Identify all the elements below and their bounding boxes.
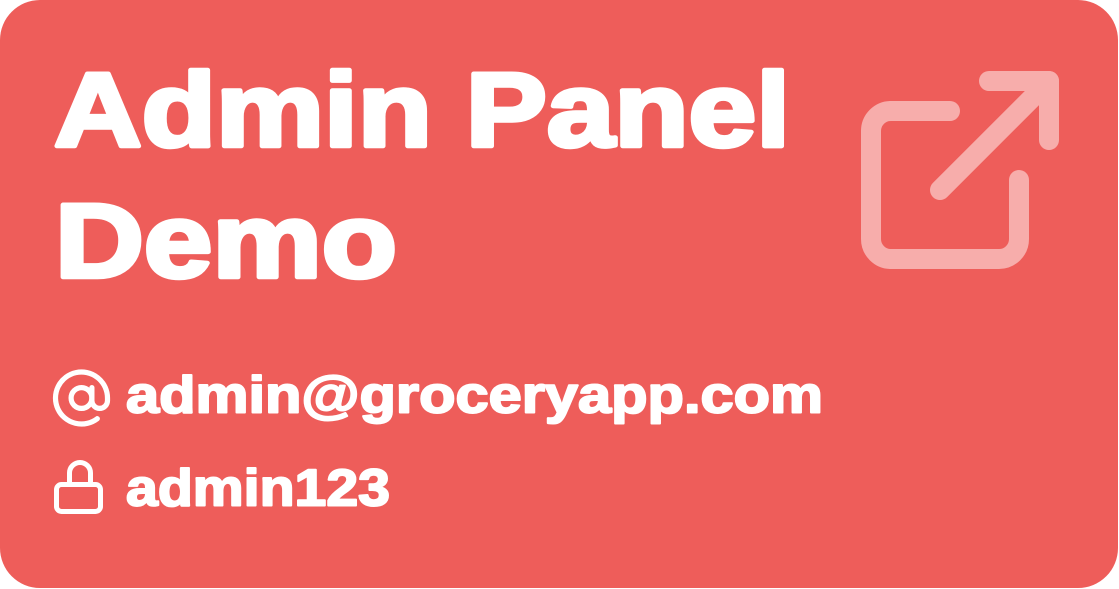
password: admin123 — [126, 460, 390, 518]
icon: padlock — [56, 462, 100, 512]
title — [54, 52, 790, 300]
icon: at sign — [55, 372, 108, 424]
icon: external link — [871, 81, 1049, 259]
title: Admin Panel — [54, 52, 790, 169]
title: Demo — [55, 183, 397, 300]
email address: admin@groceryapp.com — [126, 366, 823, 424]
